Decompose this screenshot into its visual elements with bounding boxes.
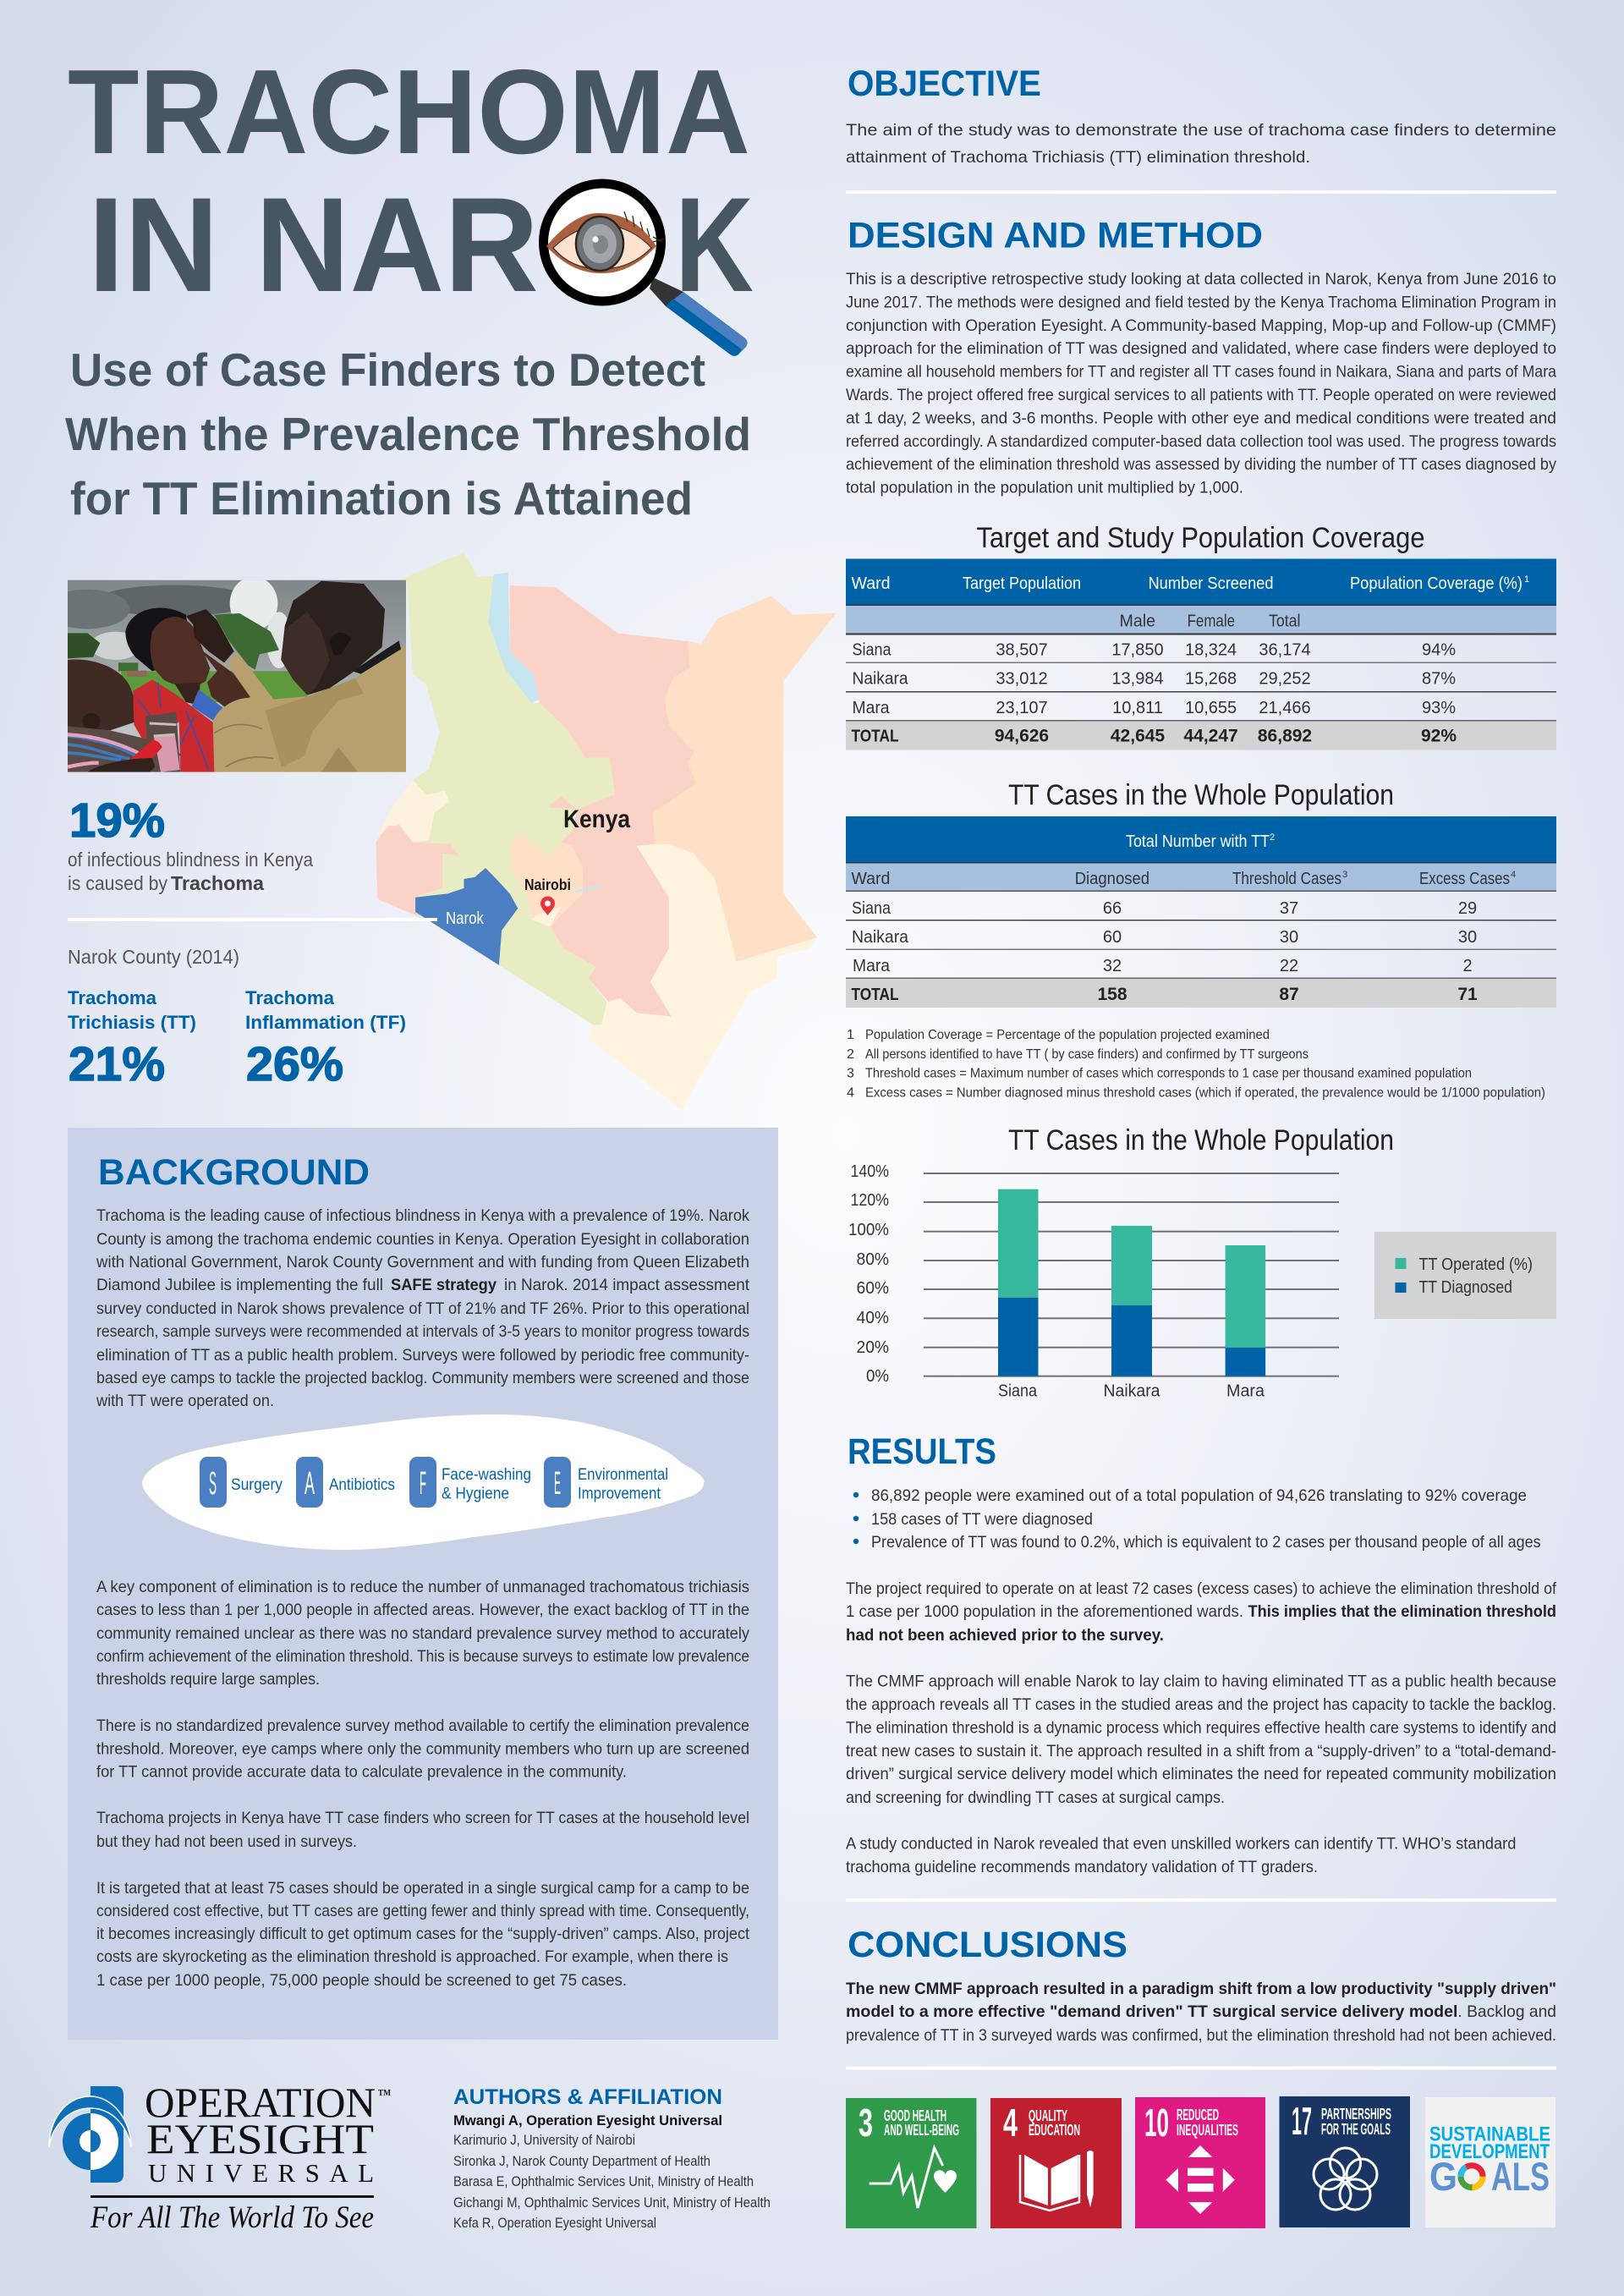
text block: background intro: with National Government, Narok County Government and with funding from Queen Elizabeth bbox=[96, 1253, 749, 1272]
region: Nyanza bbox=[376, 826, 458, 918]
legend bbox=[1374, 1232, 1556, 1319]
table: TT cases in the whole population: Ward bbox=[851, 870, 890, 888]
tile: A Antibiotics bbox=[296, 1457, 395, 1508]
footnotes: 2 bbox=[847, 1047, 854, 1062]
table: target and study population coverage: 29,252 bbox=[1259, 670, 1311, 689]
y axis labels: 100% bbox=[848, 1221, 889, 1239]
section: conclusions: CONCLUSIONS bbox=[848, 1925, 1127, 1965]
bar: Siana: Siana bbox=[998, 1382, 1038, 1401]
text block: no standardized method: threshold. Moreover, eye camps where only the community members who turn up are screened bbox=[96, 1739, 749, 1758]
text block: surgical camps: costs are skyrocketing as the elimination threshold is approached. For example, when there is bbox=[96, 1947, 728, 1966]
y axis labels: 140% bbox=[851, 1162, 889, 1181]
footnotes: Population Coverage = Percentage of the population projected examined bbox=[865, 1028, 1270, 1042]
footnotes: Threshold cases = Maximum number of cases which corresponds to 1 case per thousand examined population bbox=[865, 1066, 1472, 1081]
region: Western bbox=[377, 780, 449, 843]
table: TT cases in the whole population: 29 bbox=[1458, 899, 1477, 918]
bar: Mara: Mara bbox=[1226, 1382, 1265, 1401]
tile: S Surgery bbox=[200, 1457, 283, 1508]
tile: F Face-washing and Hygiene: F bbox=[420, 1466, 426, 1502]
title bbox=[68, 45, 754, 356]
table: target and study population coverage: 23,107 bbox=[996, 699, 1048, 717]
section: design and method: Wards. The project offered free surgical services to all patients with TT. People operated on were reviewed bbox=[846, 386, 1556, 404]
stat: 19% blindness: of infectious blindness in Kenya bbox=[68, 849, 313, 871]
man's head bbox=[281, 581, 385, 695]
table: target and study population coverage: 38,507 bbox=[996, 641, 1048, 660]
map label: Narok: Narok bbox=[446, 909, 485, 928]
tile: S Surgery: Surgery bbox=[231, 1476, 283, 1494]
text block: authors and affiliation: Mwangi A, Operation Eyesight Universal bbox=[453, 2112, 722, 2128]
text block: background intro: SAFE strategy bbox=[391, 1276, 497, 1294]
section: design and method: total population in the population unit multiplied by 1,000. bbox=[846, 479, 1243, 497]
left tree bbox=[68, 633, 100, 658]
y axis labels: 20% bbox=[856, 1338, 889, 1357]
icon: eye logo mark bbox=[49, 2086, 131, 2183]
photo: eye examination bbox=[45, 577, 406, 772]
bar: Naikara: Naikara bbox=[1103, 1382, 1160, 1401]
region: Rift Valley bbox=[376, 552, 615, 1025]
title line: TRACHOMA: TRACHOMA bbox=[68, 45, 750, 179]
tile: Sustainable Development Goals logo: ALS bbox=[1491, 2154, 1550, 2199]
table: TT cases in the whole population: 32 bbox=[1103, 957, 1122, 975]
table: TT cases in the whole population: Threshold Cases bbox=[1232, 870, 1341, 888]
table: target and study population coverage: Total bbox=[1269, 612, 1301, 631]
tile: SDG 4: QUALITY bbox=[1029, 2107, 1067, 2124]
title line: IN NAROK: IN NAR bbox=[88, 169, 539, 320]
table: target and study population coverage: 18,324 bbox=[1185, 641, 1237, 660]
text block: background intro: with TT were operated on. bbox=[96, 1392, 274, 1410]
subtitle: Use of Case Finders to Detect bbox=[70, 343, 705, 396]
text block: elimination component bbox=[96, 1578, 749, 1689]
table: target and study population coverage: Ward bbox=[851, 574, 890, 593]
section: conclusions: The new CMMF approach resulted in a paradigm shift from a low productivity "supply driven" bbox=[846, 1980, 1556, 1998]
table: target and study population coverage: 42,645 bbox=[1111, 727, 1165, 746]
text block: background intro: Diamond Jubilee is implementing the full bbox=[96, 1276, 383, 1294]
table: target and study population coverage bbox=[846, 522, 1556, 750]
text block: surgical camps bbox=[96, 1879, 750, 1990]
panel: background bbox=[68, 1128, 778, 2040]
table: target and study population coverage: 92% bbox=[1421, 727, 1457, 746]
bullet list: 158 cases of TT were diagnosed bbox=[871, 1510, 1093, 1529]
section: conclusions: model to a more effective "demand driven" TT surgical service delivery model bbox=[846, 2002, 1457, 2021]
y axis labels bbox=[848, 1162, 889, 1386]
baby bbox=[68, 659, 140, 730]
section: design and method: approach for the elimination of TT was designed and validated, where case finders were deployed to bbox=[846, 339, 1556, 358]
section: conclusions: . Backlog and bbox=[1457, 2002, 1556, 2021]
text block: surgical camps: considered cost effective, but TT cases are getting fewer and thinly spread with time. Consequently, bbox=[96, 1902, 749, 1920]
text block: CMMF approach: The CMMF approach will enable Narok to lay claim to having eliminated TT as a public health because bbox=[846, 1673, 1556, 1691]
tile: F Face-washing and Hygiene: Face-washing bbox=[442, 1466, 531, 1484]
text block: WHO guideline: trachoma guideline recommends mandatory validation of TT graders. bbox=[846, 1858, 1318, 1876]
tile: SDG 4: 4 bbox=[1003, 2101, 1018, 2145]
table: target and study population coverage: Siana bbox=[853, 641, 892, 660]
text block: authors and affiliation bbox=[453, 2085, 771, 2231]
heading: background: BACKGROUND bbox=[98, 1152, 370, 1193]
text block: background intro: based eye camps to tackle the projected backlog. Community members were screened and those bbox=[96, 1369, 749, 1387]
y axis labels: 0% bbox=[866, 1367, 889, 1386]
stat: trachoma inflammation: Inflammation (TF) bbox=[245, 1012, 406, 1033]
map label: Kenya: Kenya bbox=[563, 805, 630, 833]
table: TT cases in the whole population: Diagnosed bbox=[1075, 870, 1149, 888]
section: conclusions bbox=[846, 1925, 1556, 2045]
text block: WHO guideline: A study conducted in Narok revealed that even unskilled workers can identify TT. WHO’s standard bbox=[846, 1835, 1516, 1854]
table title: TT Cases in the Whole Population bbox=[1008, 779, 1394, 811]
tile: F Face-washing and Hygiene: & Hygiene bbox=[442, 1486, 509, 1502]
footnotes: 3 bbox=[847, 1066, 854, 1081]
table: target and study population coverage: 21,466 bbox=[1259, 699, 1311, 717]
text block: CMMF approach: the approach reveals all TT cases in the studied areas and the project has capacity to tackle the backlog. bbox=[846, 1695, 1556, 1714]
text block: threshold requirement bbox=[846, 1579, 1557, 1645]
table: target and study population coverage: Male bbox=[1120, 612, 1155, 631]
tile: A Antibiotics: A bbox=[304, 1466, 315, 1502]
tile: SDG 4: EDUCATION bbox=[1029, 2122, 1080, 2139]
logo: Operation Eyesight Universal: EYESIGHT bbox=[146, 2115, 374, 2162]
tile: SDG 17: FOR THE GOALS bbox=[1321, 2121, 1391, 2138]
text block: surgical camps: 1 case per 1000 people, 75,000 people should be screened to get 75 cases. bbox=[96, 1971, 627, 1990]
region: North Eastern bbox=[653, 596, 837, 962]
section: design and method: at 1 day, 2 weeks, and 3-6 months. People with other eye and medical conditions were treated and bbox=[846, 409, 1556, 427]
region: Lake Turkana bbox=[488, 573, 540, 703]
bullet list bbox=[853, 1486, 1541, 1552]
text block: elimination component: community remained unclear as there was no standard prevalence survey method to accurately bbox=[96, 1624, 749, 1643]
stat: trachoma trichiasis: 21% bbox=[69, 1037, 165, 1091]
table: target and study population coverage: Female bbox=[1188, 612, 1235, 631]
section: objective: The aim of the study was to demonstrate the use of trachoma case finders to determine bbox=[846, 121, 1556, 140]
table: TT cases in the whole population: Excess Cases bbox=[1419, 870, 1510, 888]
y axis labels: 60% bbox=[856, 1279, 889, 1298]
table: target and study population coverage: 94% bbox=[1422, 641, 1456, 660]
map label: Nairobi: Nairobi bbox=[524, 876, 571, 893]
logo: Operation Eyesight Universal: For All The World To See bbox=[90, 2200, 374, 2235]
tile: SDG 3: 3 bbox=[859, 2101, 873, 2145]
logo: Operation Eyesight Universal: UNIVERSAL bbox=[148, 2158, 374, 2188]
table: target and study population coverage: 94,626 bbox=[995, 727, 1049, 746]
bar: Mara bbox=[1226, 1245, 1265, 1401]
table: TT cases in the whole population: 30 bbox=[1280, 928, 1298, 947]
footnotes: Excess cases = Number diagnosed minus threshold cases (which if operated, the prevalence would be 1/1000 population) bbox=[865, 1086, 1545, 1100]
section: design and method: examine all household members for TT and register all TT cases found in Naikara, Siana and parts of Mara bbox=[846, 363, 1556, 382]
text block: no standardized method: for TT cannot provide accurate data to calculate prevalence in the community. bbox=[96, 1763, 627, 1782]
section: design and method: June 2017. The methods were designed and field tested by the Kenya Trachoma Elimination Program in bbox=[846, 293, 1556, 311]
text block: case finders bbox=[96, 1809, 749, 1851]
logo: Operation Eyesight Universal: TM bbox=[378, 2089, 392, 2098]
icon: magnifying glass with eye bbox=[543, 184, 748, 356]
table: TT cases in the whole population: 22 bbox=[1280, 957, 1298, 975]
map of Kenya bbox=[376, 552, 837, 1110]
table: target and study population coverage: 86,892 bbox=[1258, 727, 1312, 746]
table: target and study population coverage: Number Screened bbox=[1149, 574, 1274, 593]
tile: A Antibiotics: Antibiotics bbox=[329, 1476, 395, 1494]
section: design and method: conjunction with Operation Eyesight. A Community-based Mapping, Mop-up and Follow-up (CMMF) bbox=[846, 316, 1556, 335]
table: TT cases in the whole population: 37 bbox=[1280, 899, 1298, 918]
tile: SDG 10 bbox=[1135, 2097, 1265, 2228]
subtitle: When the Prevalence Threshold bbox=[65, 408, 751, 460]
text block: background intro: Trachoma is the leading cause of infectious blindness in Kenya with a prevalence of 19%. Narok bbox=[96, 1206, 749, 1225]
table: target and study population coverage: Mara bbox=[853, 699, 890, 717]
text block: authors and affiliation: Karimurio J, University of Nairobi bbox=[453, 2132, 635, 2148]
text block: background intro bbox=[96, 1206, 750, 1410]
table: TT cases in the whole population: Mara bbox=[853, 957, 891, 975]
footnotes bbox=[847, 1028, 1545, 1100]
table: TT cases in the whole population: TOTAL bbox=[851, 986, 898, 1004]
bullet list: Prevalence of TT was found to 0.2%, which is equivalent to 2 cases per thousand people of all ages bbox=[871, 1533, 1541, 1552]
table: TT cases in the whole population: 2 bbox=[1462, 957, 1473, 975]
table: target and study population coverage: Target Population bbox=[963, 574, 1081, 593]
text block: background intro: County is among the trachoma endemic counties in Kenya. Operation Eyesight in collaboration bbox=[96, 1230, 749, 1249]
table: target and study population coverage: Population Coverage (%) bbox=[1350, 574, 1522, 593]
y axis labels: 40% bbox=[856, 1309, 889, 1327]
centre tree bbox=[214, 613, 279, 670]
stat: trachoma trichiasis bbox=[68, 987, 196, 1091]
table: target and study population coverage: 93% bbox=[1422, 699, 1456, 717]
table: target and study population coverage: 44,247 bbox=[1183, 727, 1238, 746]
tile: SDG 3: AND WELL-BEING bbox=[884, 2122, 959, 2139]
table: TT cases in the whole population: 4 bbox=[1511, 870, 1516, 880]
table: target and study population coverage: 33,012 bbox=[996, 670, 1048, 689]
subtitle bbox=[65, 343, 751, 525]
logo: Operation Eyesight Universal: OPERATION bbox=[145, 2079, 376, 2126]
logo: Operation Eyesight Universal bbox=[49, 2079, 392, 2235]
bar: Siana bbox=[998, 1189, 1039, 1401]
text block: elimination component: confirm achievement of the elimination threshold. This is because surveys to estimate low prevalence bbox=[96, 1647, 749, 1666]
text block: authors and affiliation: AUTHORS & AFFILIATION bbox=[453, 2085, 722, 2109]
section: design and method: achievement of the elimination threshold was assessed by dividing the number of TT cases diagnosed by bbox=[846, 455, 1556, 474]
table: target and study population coverage: 36,174 bbox=[1259, 641, 1311, 660]
text block: CMMF approach: The elimination threshold is a dynamic process which requires effective health care systems to identify and bbox=[846, 1719, 1556, 1738]
tile: SDG 10: 10 bbox=[1144, 2101, 1169, 2145]
text block: case finders: Trachoma projects in Kenya have TT case finders who screen for TT cases at the household level bbox=[96, 1809, 749, 1827]
tile: E Environmental Improvement bbox=[544, 1457, 668, 1508]
text block: case finders: but they had not been used in surveys. bbox=[96, 1832, 357, 1851]
table: target and study population coverage: Naikara bbox=[853, 670, 908, 689]
region: Nairobi bbox=[531, 907, 561, 926]
table: TT cases in the whole population: 60 bbox=[1103, 928, 1122, 947]
footnotes: 1 bbox=[847, 1028, 854, 1042]
text block: elimination component: A key component of elimination is to reduce the number of unmanaged trachomatous trichiasis bbox=[96, 1578, 749, 1596]
text block: surgical camps: It is targeted that at least 75 cases should be operated in a single surgical camp for a camp to be bbox=[96, 1879, 749, 1898]
text block: CMMF approach bbox=[846, 1673, 1556, 1807]
text block: authors and affiliation: Barasa E, Ophthalmic Services Unit, Ministry of Health bbox=[453, 2173, 754, 2189]
chart title: TT Cases in the Whole Population bbox=[1008, 1124, 1394, 1156]
tile: E Environmental Improvement: E bbox=[554, 1466, 561, 1502]
legend: TT Diagnosed bbox=[1419, 1278, 1512, 1297]
text block: background intro: research, sample surveys were recommended at intervals of 3-5 years to monitor progress towards bbox=[96, 1322, 749, 1341]
y axis labels: 120% bbox=[851, 1191, 889, 1210]
tile: SDG 17: PARTNERSHIPS bbox=[1321, 2106, 1391, 2123]
stat: 19% blindness: 19% bbox=[69, 794, 165, 848]
table: TT cases in the whole population: Total Number with TT bbox=[1126, 832, 1270, 851]
tile: Sustainable Development Goals logo: G bbox=[1429, 2154, 1457, 2199]
table: TT cases in the whole population bbox=[846, 779, 1556, 1008]
text block: elimination component: thresholds require large samples. bbox=[96, 1670, 320, 1689]
table: TT cases in the whole population: Siana bbox=[852, 899, 892, 918]
text block: CMMF approach: treat new cases to sustain it. The approach resulted in a shift from a “supply-driven” to a “total-demand- bbox=[846, 1742, 1556, 1760]
table: TT cases in the whole population: 66 bbox=[1103, 899, 1122, 918]
tile: SDG 4 bbox=[990, 2098, 1122, 2228]
table: target and study population coverage: 15,268 bbox=[1185, 670, 1237, 689]
tile: E Environmental Improvement: Improvement bbox=[578, 1486, 661, 1502]
text block: no standardized method: There is no standardized prevalence survey method available to certify the elimination prevalence bbox=[96, 1717, 749, 1735]
text block: threshold requirement: This implies that the elimination threshold bbox=[1248, 1602, 1556, 1621]
section: objective: OBJECTIVE bbox=[848, 63, 1041, 104]
region: Coast bbox=[588, 844, 817, 1110]
title line: IN NAROK: K bbox=[675, 169, 754, 320]
table: target and study population coverage: 87% bbox=[1422, 670, 1456, 689]
table: target and study population coverage: 1 bbox=[1524, 574, 1529, 585]
tile: SDG 3 bbox=[846, 2098, 976, 2228]
section: design and method: This is a descriptive retrospective study looking at data collected in Narok, Kenya from June 2016 to bbox=[846, 270, 1556, 288]
section: design and method: DESIGN AND METHOD bbox=[848, 215, 1263, 255]
table title: Target and Study Population Coverage bbox=[976, 522, 1424, 554]
table: target and study population coverage: 17,850 bbox=[1111, 641, 1164, 660]
table: TT cases in the whole population: 158 bbox=[1097, 985, 1127, 1004]
text block: background intro: survey conducted in Narok shows prevalence of TT of 21% and TF 26%. Prior to this operational bbox=[96, 1299, 749, 1318]
stat: trachoma trichiasis: Trichiasis (TT) bbox=[68, 1012, 196, 1033]
bullet list: 86,892 people were examined out of a total population of 94,626 translating to 92% coverage bbox=[871, 1486, 1527, 1505]
table: TT cases in the whole population: 71 bbox=[1457, 985, 1478, 1004]
section: design and method bbox=[846, 215, 1556, 497]
tile: S Surgery: S bbox=[209, 1466, 217, 1502]
legend: TT Operated (%) bbox=[1419, 1255, 1533, 1274]
baby sweater bbox=[68, 712, 180, 772]
table: target and study population coverage: 10,811 bbox=[1112, 699, 1163, 717]
table: target and study population coverage: 10,655 bbox=[1185, 699, 1237, 717]
table: target and study population coverage: TOTAL bbox=[851, 728, 898, 746]
stat: trachoma inflammation bbox=[245, 987, 406, 1091]
subtitle: for TT Elimination is Attained bbox=[70, 472, 693, 525]
section: objective: attainment of Trachoma Trichiasis (TT) elimination threshold. bbox=[846, 148, 1310, 167]
table: TT cases in the whole population: 2 bbox=[1270, 832, 1275, 843]
tile: Sustainable Development Goals logo bbox=[1425, 2097, 1555, 2227]
hands bbox=[186, 609, 234, 662]
section: design and method: referred accordingly. A standardized computer-based data collection tool was used. The progress towards bbox=[846, 432, 1556, 451]
bar chart: TT cases in the whole population bbox=[848, 1124, 1556, 1401]
stat: trachoma inflammation: Trachoma bbox=[245, 987, 335, 1008]
text block: authors and affiliation: Gichangi M, Ophthalmic Services Unit, Ministry of Health bbox=[453, 2194, 771, 2211]
tile: Sustainable Development Goals logo: SUSTAINABLE bbox=[1429, 2123, 1550, 2146]
text block: no standardized method bbox=[96, 1717, 749, 1782]
tile: SDG 10: REDUCED bbox=[1177, 2106, 1219, 2123]
tile: Sustainable Development Goals logo: DEVELOPMENT bbox=[1429, 2140, 1550, 2163]
table: TT cases in the whole population: 30 bbox=[1458, 928, 1477, 947]
table: TT cases in the whole population: Naikara bbox=[852, 928, 909, 947]
tile: SDG 3: GOOD HEALTH bbox=[884, 2107, 946, 2124]
text block: elimination component: cases to less than 1 per 1,000 people in affected areas. However, the exact backlog of TT in the bbox=[96, 1601, 749, 1619]
section: results bbox=[846, 1431, 1557, 1876]
table: TT cases in the whole population: 3 bbox=[1342, 870, 1347, 880]
text block: background intro: elimination of TT as a public health problem. Surveys were followed by periodic free community- bbox=[96, 1346, 749, 1365]
footnotes: 4 bbox=[847, 1086, 854, 1100]
text block: CMMF approach: driven” surgical service delivery model which eliminates the need for repeated community mobilization bbox=[846, 1765, 1556, 1783]
section: conclusions: prevalence of TT in 3 surveyed wards was confirmed, but the elimination threshold had not been achieved. bbox=[846, 2026, 1556, 2045]
table: TT cases in the whole population: 87 bbox=[1279, 985, 1299, 1004]
man's jacket bbox=[213, 645, 406, 772]
tile: SDG 17 bbox=[1279, 2096, 1410, 2227]
text block: CMMF approach: and screening for dwindling TT cases at surgical camps. bbox=[846, 1788, 1225, 1807]
region: Central bbox=[510, 835, 583, 926]
stats: Narok County bbox=[68, 946, 406, 1091]
y axis labels: 80% bbox=[856, 1250, 889, 1269]
tile: E Environmental Improvement: Environmental bbox=[578, 1466, 668, 1484]
stat: 19% blindness: is caused by bbox=[68, 872, 167, 894]
stats: Narok County: Narok County (2014) bbox=[68, 946, 239, 968]
text block: authors and affiliation: Kefa R, Operation Eyesight Universal bbox=[453, 2215, 656, 2231]
woman bbox=[125, 607, 192, 671]
stat: trachoma trichiasis: Trachoma bbox=[68, 987, 157, 1008]
SDG tiles bbox=[846, 2096, 1555, 2228]
text block: threshold requirement: The project required to operate on at least 72 cases (excess cases) to achieve the elimination threshold of bbox=[846, 1579, 1557, 1598]
text block: threshold requirement: 1 case per 1000 population in the aforementioned wards. bbox=[846, 1602, 1243, 1621]
stat: 19% blindness bbox=[68, 794, 313, 894]
region: Eastern bbox=[510, 585, 696, 1017]
bar: Naikara bbox=[1103, 1226, 1160, 1401]
field bbox=[121, 671, 307, 702]
tile: SDG 10: INEQUALITIES bbox=[1177, 2122, 1238, 2139]
section: objective bbox=[846, 63, 1556, 167]
footnotes: All persons identified to have TT ( by case finders) and confirmed by TT surgeons bbox=[865, 1047, 1309, 1062]
text block: WHO guideline bbox=[846, 1835, 1516, 1876]
stat: 19% blindness: Trachoma bbox=[171, 872, 264, 894]
table: target and study population coverage: 13,984 bbox=[1111, 670, 1164, 689]
section: results: RESULTS bbox=[848, 1431, 996, 1472]
text block: surgical camps: it becomes increasingly difficult to get optimum cases for the “supply-driven” camps. Also, project bbox=[96, 1925, 750, 1943]
collar bbox=[353, 640, 401, 674]
diagram: SAFE strategy bbox=[142, 1414, 705, 1550]
tile: F Face-washing and Hygiene bbox=[409, 1457, 531, 1508]
phone bbox=[130, 740, 162, 759]
text block: background intro: in Narok. 2014 impact assessment bbox=[504, 1276, 750, 1294]
title line: IN NAROK bbox=[88, 169, 754, 320]
text block: authors and affiliation: Sironka J, Narok County Department of Health bbox=[453, 2153, 710, 2169]
region: Narok county bbox=[415, 868, 518, 965]
text block: threshold requirement: had not been achieved prior to the survey. bbox=[846, 1626, 1164, 1645]
icon: map pin bbox=[540, 897, 555, 915]
tile: SDG 17: 17 bbox=[1292, 2099, 1312, 2143]
stat: trachoma inflammation: 26% bbox=[246, 1037, 343, 1091]
